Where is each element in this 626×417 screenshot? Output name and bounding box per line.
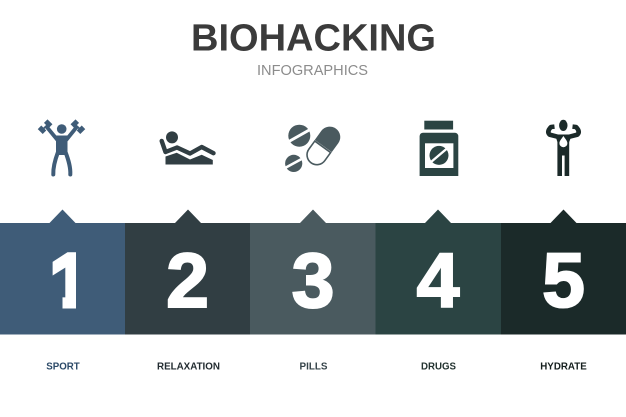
label: drugs: DRUGS: [421, 360, 456, 372]
panel: step 2 relaxation: 2: [166, 238, 209, 324]
panel: step 1 sport: 1: [50, 238, 92, 324]
label: pills: PILLS: [300, 360, 328, 372]
label: relaxation: RELAXATION: [157, 360, 220, 372]
panel: step 1 sport: [0, 210, 126, 334]
panel: step 3 pills: [250, 210, 376, 334]
panel: step 4 drugs: 4: [417, 238, 460, 324]
panel: step 2 relaxation: [125, 210, 250, 334]
icon: hydrate, muscular man with water drop: [548, 120, 579, 176]
label: hydrate: HYDRATE: [540, 360, 587, 372]
icon: sport, man lifting dumbbells: [38, 119, 85, 174]
subtitle: INFOGRAPHICS: [257, 63, 368, 79]
panel: step 4 drugs: [376, 210, 501, 334]
panel: step 3 pills: 3: [292, 238, 334, 324]
icon: drug jar: [420, 121, 458, 176]
label: sport: SPORT: [46, 360, 80, 372]
panel: step 5 hydrate: 5: [542, 238, 585, 324]
icon: relaxation, person reclining: [162, 131, 214, 164]
icon: pills and capsule: [285, 122, 344, 172]
title: BIOHACKING: [191, 18, 436, 60]
panel: step 5 hydrate: [501, 210, 626, 334]
